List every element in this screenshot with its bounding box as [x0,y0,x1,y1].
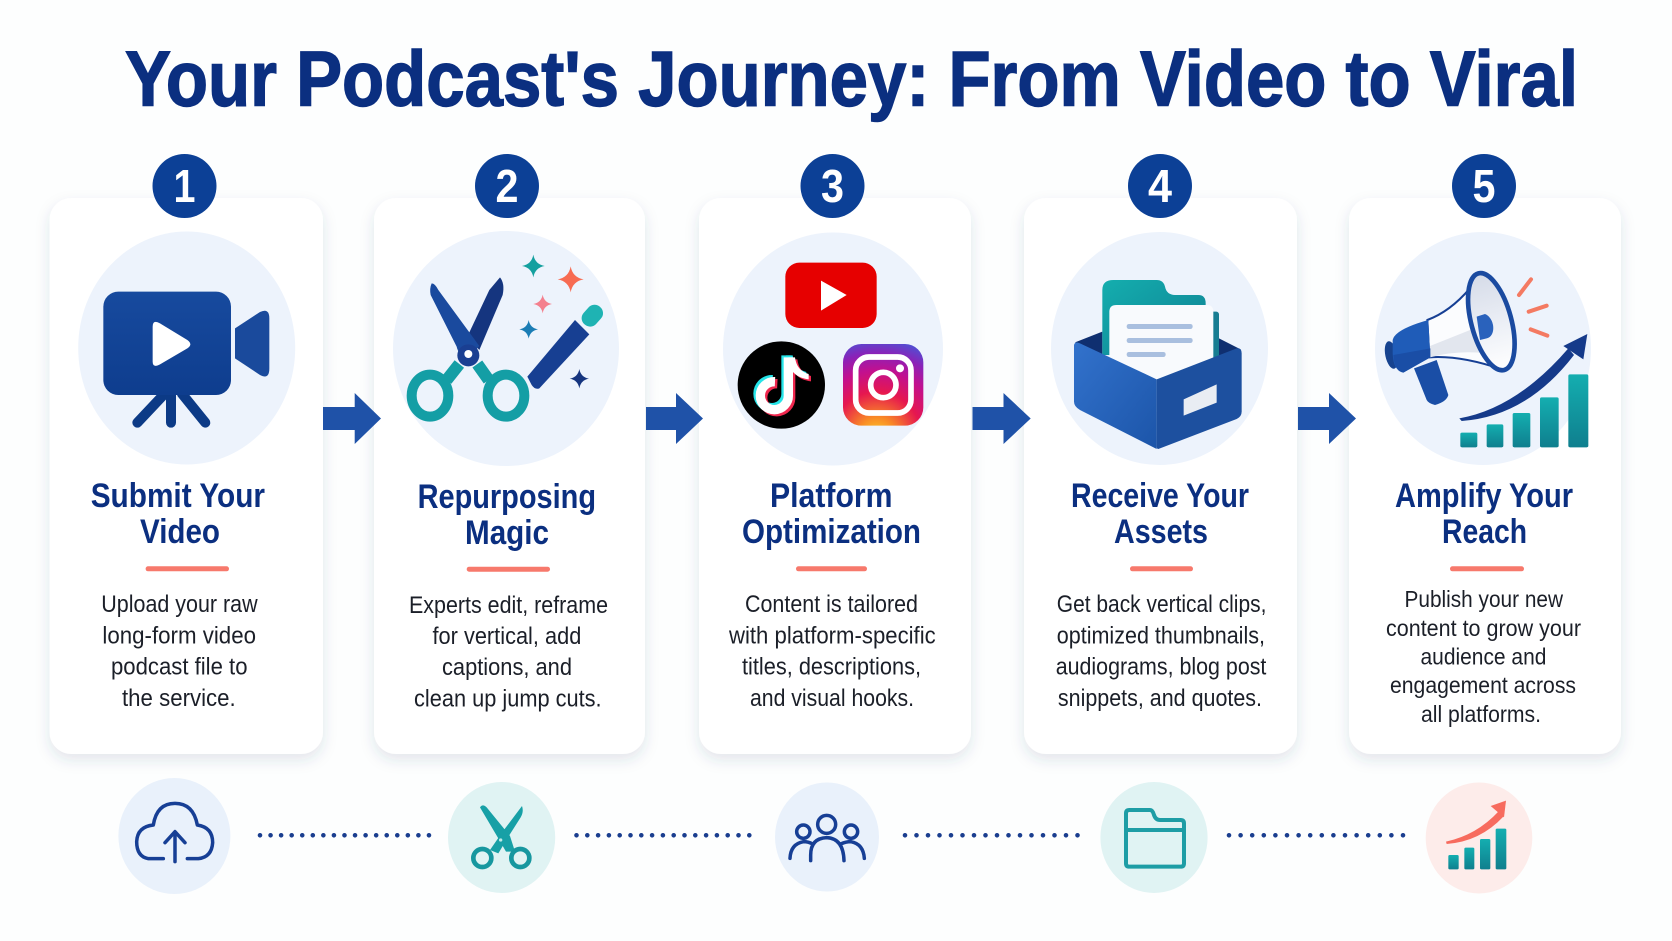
number badge 3 [800,154,864,218]
description: audiograms, blog post [1056,654,1267,680]
heading: Reach [1442,513,1527,551]
description: Content is tailored [745,591,918,618]
icon: social platform logos [738,263,923,429]
arrow: step 3 to 4 [972,393,1031,444]
heading: Optimization [742,513,921,551]
accent underline [467,567,550,572]
accent underline [1450,566,1524,571]
icon: scissors [448,782,555,893]
heading [742,477,921,551]
accent underline [146,566,229,571]
icon: cloud upload [118,778,230,894]
icon: growth chart [1426,782,1532,894]
heading: Submit Your [91,477,265,515]
icon circle [1051,232,1268,465]
connector dots [260,833,431,838]
number badge 3: 3 [821,160,844,212]
icon circle [1375,232,1591,465]
card background [374,198,645,754]
icon: scissors, pen and sparkles [412,255,606,417]
description: clean up jump cuts. [414,686,602,712]
icon: video camera [103,292,269,423]
card background [699,198,971,754]
panel: step 3 platform optimization [699,154,971,754]
number badge 2: 2 [496,160,518,212]
description: with platform-specific [728,622,936,650]
heading [1071,477,1249,551]
accent underline [1130,566,1193,571]
description: podcast file to [111,654,248,680]
description: Experts edit, reframe [409,592,608,619]
description: the service. [122,685,236,712]
connector dots [905,833,1079,838]
logo: video platform [785,263,877,328]
card background [1349,198,1621,754]
icon circle [78,232,295,464]
heading [418,478,596,552]
description [1056,591,1267,712]
heading: Magic [465,514,549,552]
panel: step 4 receive your assets [1024,154,1297,754]
connector dots [1229,833,1405,838]
connector dots [576,833,751,838]
accent underline [796,566,867,571]
arrow: step 1 to 2 [323,393,381,444]
description: long-form video [102,622,256,650]
logo: music note app [738,341,825,429]
number badge 5 [1452,154,1516,218]
icon: folder [1100,782,1208,893]
icon: megaphone and growth chart [1383,268,1588,447]
description: titles, descriptions, [742,654,921,680]
heading [1395,477,1573,551]
description: content to grow your [1386,615,1581,641]
heading [91,477,265,551]
description [409,592,608,712]
number badge 4 [1128,154,1192,218]
card background [1024,198,1297,754]
description: Upload your raw [101,591,258,618]
description [728,591,936,712]
icon: file box with folder [1074,280,1242,449]
icon circle [723,232,943,466]
heading: Receive Your [1071,477,1249,515]
card background [50,198,323,754]
description: audience and [1420,644,1546,670]
number badge 5: 5 [1472,160,1496,212]
description: Publish your new [1404,586,1563,612]
panel: step 2 repurposing magic [374,154,645,754]
number badge 2 [475,154,539,218]
description: all platforms. [1421,701,1541,727]
description: captions, and [442,654,572,681]
bottom icon row [118,778,1532,894]
arrow: step 2 to 3 [646,393,703,444]
logo: camera app [843,344,923,426]
icon: people [775,782,879,892]
heading: Assets [1114,513,1208,551]
number badge 1 [152,154,216,218]
heading: Repurposing [418,478,596,516]
arrow: step 4 to 5 [1298,393,1356,444]
number badge 1: 1 [174,160,196,212]
description: optimized thumbnails, [1057,622,1265,650]
icon circle [393,231,619,466]
heading: Amplify Your [1395,477,1573,515]
panel: step 1 submit your video [50,154,323,754]
description: engagement across [1390,672,1576,698]
heading: Platform [770,477,892,515]
number badge 4: 4 [1148,160,1172,212]
panel: step 5 amplify your reach [1349,154,1621,754]
description: for vertical, add [432,623,581,650]
description [1386,586,1581,727]
description: snippets, and quotes. [1058,685,1262,712]
description: Get back vertical clips, [1057,591,1266,618]
heading: Video [140,513,220,551]
description: and visual hooks. [750,685,914,712]
description [101,591,258,712]
